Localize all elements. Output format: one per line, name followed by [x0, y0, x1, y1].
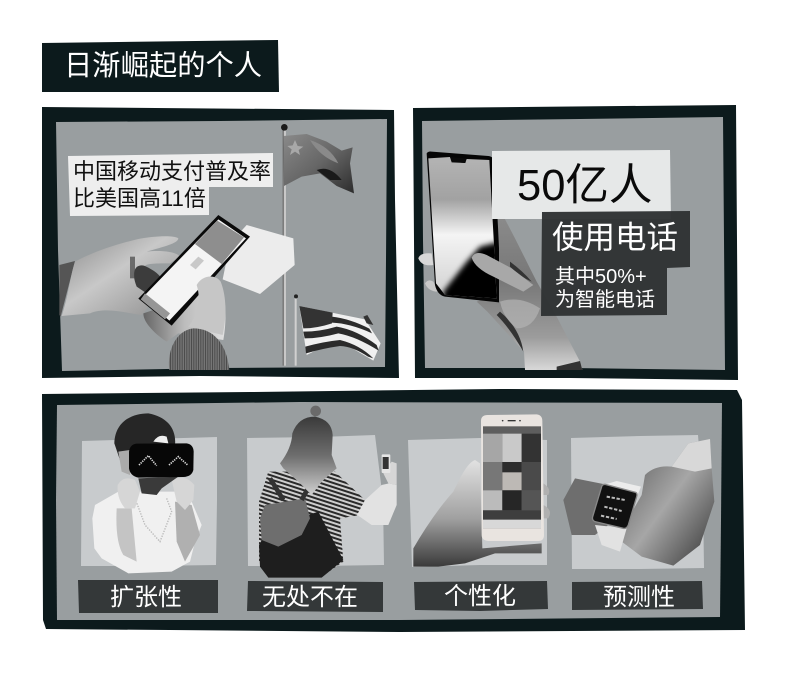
- callout: 5 billion people: [492, 150, 671, 219]
- label: [572, 581, 703, 611]
- title: 日渐崛起的个人: [64, 49, 262, 81]
- trait: expansive: [78, 413, 218, 613]
- callout: 5 billion people: 50亿人: [517, 162, 652, 210]
- label: 扩张性: [110, 584, 182, 611]
- trait: predictive: [563, 435, 714, 611]
- photo: wrist with smartwatch: [563, 439, 714, 566]
- photo: hand holding smartphone: [418, 152, 582, 370]
- label: 预测性: [603, 584, 675, 611]
- photo: hand holding phone with photo grid: [413, 414, 550, 567]
- label: 个性化: [444, 583, 516, 610]
- photo: hands paying by phone: [59, 215, 295, 370]
- callout: mobile payment penetration: 中国移动支付普及率: [73, 159, 271, 184]
- label: [78, 580, 218, 613]
- panel: four traits: [42, 389, 745, 632]
- callout: use phones: [541, 211, 690, 316]
- trait: ubiquitous: [247, 406, 397, 612]
- callout: use phones: 为智能电话: [555, 288, 655, 311]
- callout: mobile payment penetration: 比美国高11倍: [73, 186, 206, 211]
- callout: mobile payment penetration: [68, 153, 273, 216]
- panel: 5 billion phone users: [413, 105, 738, 380]
- panel: mobile payment: [42, 107, 399, 378]
- trait: personalized: [408, 414, 550, 611]
- photo: flags: [281, 124, 381, 366]
- callout: use phones: 其中50%+: [555, 265, 647, 288]
- callout: use phones: 使用电话: [552, 219, 678, 255]
- label: [247, 581, 383, 612]
- label: 无处不在: [262, 584, 358, 611]
- photo: woman taking a selfie with backpack: [259, 406, 397, 578]
- title: [42, 40, 279, 92]
- photo: child with VR headset: [92, 413, 202, 573]
- label: [414, 581, 548, 611]
